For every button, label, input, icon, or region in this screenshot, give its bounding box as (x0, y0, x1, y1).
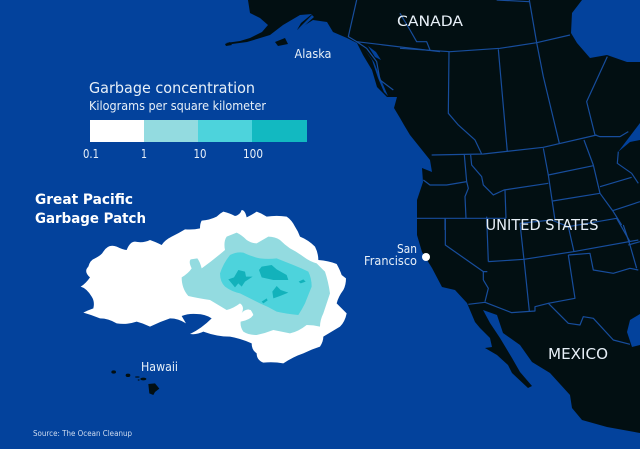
Alaskan panhandle islands (365, 46, 388, 96)
small Alaskan bay islands (225, 38, 288, 46)
legend subtitle: Kilograms per square kilometer (89, 99, 266, 113)
label: San Francisco (364, 242, 417, 268)
zones: 100+ kg (228, 265, 306, 303)
label: San Francisco: Francisco (364, 254, 417, 268)
southern borders (468, 225, 640, 344)
legend colour scale (90, 120, 307, 142)
legend scale labels: 0.1 (83, 147, 99, 161)
label: United States: UNITED STATES (486, 216, 598, 234)
inlet: Cook Inlet (297, 15, 314, 30)
zone: 0.1–1 kg (81, 210, 347, 363)
heading: Great Pacific Garbage Patch: Garbage Patch (35, 211, 146, 227)
legend scale labels: 100 (243, 147, 263, 161)
garbage patch map (81, 210, 347, 363)
label: San Francisco: San (397, 242, 417, 256)
white notch in zone (244, 310, 252, 318)
heading: Great Pacific Garbage Patch: Great Pacific (35, 192, 133, 208)
label: Alaska: Alaska (294, 47, 332, 61)
legend scale labels: 1 (141, 147, 147, 161)
borders (348, 0, 640, 344)
land: North America (226, 0, 640, 433)
label: Canada: CANADA (397, 14, 463, 30)
label: Mexico: MEXICO (548, 345, 608, 363)
central states (445, 217, 638, 272)
zone: 10–100 kg (220, 252, 312, 315)
legend scale labels: 10 (194, 147, 206, 161)
source note: Source: The Ocean Cleanup (33, 429, 132, 438)
label: Hawaii: Hawaii (141, 359, 178, 374)
Alaska border (348, 0, 440, 90)
marker: San Francisco (422, 253, 430, 261)
legend title: Garbage concentration (89, 79, 255, 97)
legend scale labels (83, 147, 263, 161)
zone: 1–10 kg (182, 233, 330, 335)
Canadian and northern borders (400, 0, 640, 230)
heading: Great Pacific Garbage Patch (35, 192, 146, 227)
icon: Hawaiian islands (111, 370, 159, 395)
legend (83, 79, 307, 161)
